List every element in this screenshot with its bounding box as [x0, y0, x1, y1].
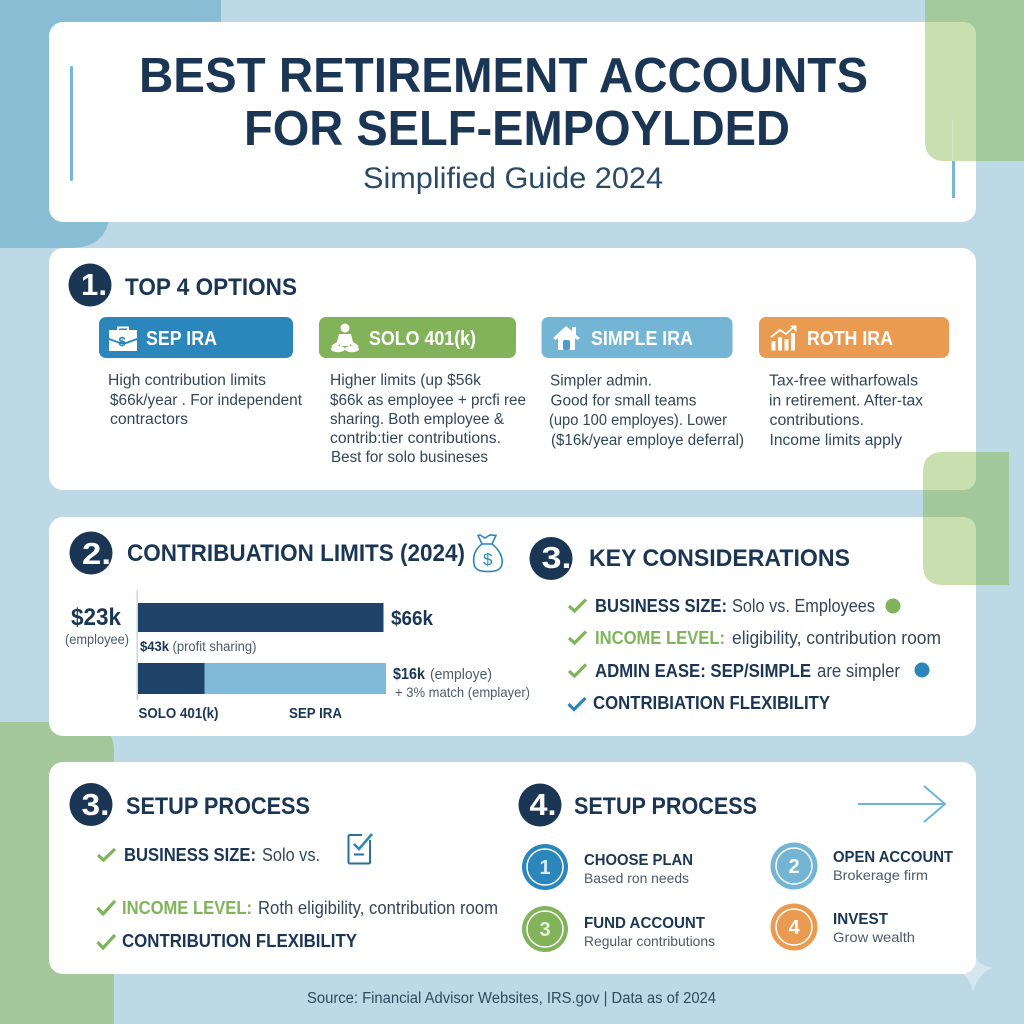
icon: briefcase	[109, 328, 137, 351]
option: SEP IRA: SEP IRA	[146, 328, 217, 350]
description: Simpler admin.	[550, 372, 652, 390]
description: Good for small teams	[550, 392, 697, 410]
step 1: 1	[539, 857, 551, 879]
description	[108, 372, 303, 428]
list: key considerations	[568, 596, 941, 713]
description: contrib:tier contributions.	[330, 430, 501, 447]
badge: 1	[68, 264, 112, 306]
description	[330, 372, 526, 466]
axis label: solo 401(k): SOLO 401(k)	[138, 706, 219, 722]
icon: briefcase: $	[118, 334, 126, 349]
step 4	[770, 904, 915, 950]
description: contractors	[110, 411, 188, 428]
heading: setup process right: SETUP PROCESS	[574, 793, 757, 820]
option: ROTH IRA	[759, 317, 949, 449]
description: High contribution limits	[108, 372, 266, 389]
label: $16k employee + match	[393, 666, 530, 700]
bar chart	[65, 590, 530, 722]
item: income level	[98, 898, 498, 918]
item: contribution flexibility: CONTRIBIATION FLEXIBILITY	[593, 693, 830, 713]
step 3: FUND ACCOUNT	[584, 915, 705, 932]
option: SOLO 401(k)	[319, 317, 526, 466]
label: $23k employee: $23k	[71, 604, 122, 631]
step 4: 4	[788, 917, 800, 939]
item: admin ease: ADMIN EASE: SEP/SIMPLE	[595, 661, 811, 681]
option: SEP IRA	[99, 317, 303, 428]
panel: contribution limits and key considerations	[49, 517, 976, 736]
item: income level	[569, 628, 941, 648]
description: Higher limits (up $56k	[330, 372, 481, 389]
label: $23k employee: (employee)	[65, 631, 129, 647]
step 2: Brokerage firm	[833, 867, 928, 883]
description: ($16k/year employe deferral)	[551, 432, 744, 449]
arrow	[858, 786, 945, 822]
panel: title	[49, 22, 976, 222]
item: admin ease: are simpler	[817, 661, 900, 681]
badge: 2	[70, 532, 112, 574]
item: business size: Solo vs. Employees	[732, 596, 875, 616]
source note: Source: Financial Advisor Websites, IRS.gov | Data as of 2024	[307, 990, 716, 1007]
panel: setup process	[49, 762, 976, 974]
icon: clipboard check	[348, 834, 372, 864]
item: contribution flexibility: CONTRIBUTION FLEXIBILITY	[122, 931, 357, 951]
step 4: INVEST	[833, 911, 888, 928]
item: business size: BUSINESS SIZE:	[124, 845, 256, 865]
label: $16k employee + match: $16k	[393, 666, 425, 683]
bar: sep ira	[138, 663, 386, 694]
step 1	[522, 844, 693, 890]
subtitle: Simplified Guide 2024	[363, 162, 663, 195]
step 1: Based ron needs	[584, 870, 689, 886]
step 1: CHOOSE PLAN	[584, 852, 693, 869]
icon: money bag: $	[483, 550, 493, 569]
description	[769, 372, 923, 449]
option: SOLO 401(k): SOLO 401(k)	[369, 328, 476, 350]
description: in retirement. After-tax	[769, 392, 923, 410]
axis label: sep ira: SEP IRA	[289, 706, 342, 722]
label: $43k profit sharing: (profit sharing)	[172, 639, 256, 654]
description: contributions.	[770, 412, 864, 429]
item: income level: eligibility, contribution room	[732, 628, 941, 648]
option: SIMPLE IRA: SIMPLE IRA	[591, 328, 693, 350]
step 3: Regular contributions	[584, 933, 715, 949]
description: sharing. Both employee &	[330, 411, 505, 428]
item: business size: Solo vs.	[262, 845, 320, 865]
step 4: Grow wealth	[833, 929, 915, 945]
item: income level: INCOME LEVEL:	[122, 898, 252, 918]
description: Best for solo busineses	[331, 449, 488, 466]
heading: key considerations: KEY CONSIDERATIONS	[589, 545, 850, 572]
title: BEST RETIREMENT ACCOUNTS	[139, 49, 868, 103]
icon: money bag	[474, 535, 502, 572]
option: ROTH IRA: ROTH IRA	[807, 328, 893, 350]
item: business size	[98, 845, 320, 865]
badge: 3 key considerations	[530, 537, 572, 580]
step 3	[522, 906, 715, 952]
step 3: 3	[539, 919, 551, 941]
description	[549, 372, 744, 449]
item: business size: BUSINESS SIZE:	[595, 596, 727, 616]
badge: 4: 4.	[530, 787, 556, 822]
badge: 4	[518, 784, 562, 826]
panel: top 4 options	[49, 248, 976, 490]
option: SIMPLE IRA	[542, 317, 744, 449]
description: $66k/year . For independent	[110, 392, 303, 409]
step 2	[770, 842, 953, 890]
title	[139, 49, 868, 156]
label: $16k employee + match: + 3% match (emplayer)	[395, 684, 530, 700]
item: admin ease	[569, 661, 930, 681]
badge: 2: 2.	[82, 536, 111, 571]
icon: house	[553, 326, 580, 350]
item: income level: Roth eligibility, contribution room	[258, 898, 498, 918]
bar: solo 401(k)	[138, 603, 384, 632]
title: FOR SELF-EMPOYLDED	[244, 102, 790, 156]
heading: setup process left: SETUP PROCESS	[126, 793, 310, 820]
heading: contribution limits: CONTRIBUATION LIMITS (2024)	[127, 540, 465, 567]
step 2: 2	[788, 856, 800, 878]
description: Income limits apply	[770, 432, 902, 449]
description: Tax-free witharfowals	[769, 372, 918, 390]
label: $43k profit sharing: $43k	[140, 639, 169, 654]
badge: 3 setup process: 3.	[82, 787, 110, 822]
description: (upo 100 employes). Lower	[549, 412, 727, 429]
description: $66k as employee + prcfi ree	[330, 392, 526, 409]
icon: growth chart	[771, 326, 796, 350]
badge: 3 key considerations: 3.	[542, 540, 572, 575]
item: income level: INCOME LEVEL:	[595, 628, 725, 648]
badge: 1: 1.	[81, 267, 107, 302]
item: business size	[569, 596, 900, 616]
label: $66k: $66k	[391, 608, 434, 630]
icon: meditating person	[331, 324, 359, 352]
label: $16k employee + match: (employe)	[430, 666, 492, 683]
heading: top 4 options: TOP 4 OPTIONS	[125, 274, 297, 301]
step 2: OPEN ACCOUNT	[833, 849, 953, 866]
label: $23k employee	[65, 604, 129, 647]
badge: 3 setup process	[70, 783, 112, 826]
